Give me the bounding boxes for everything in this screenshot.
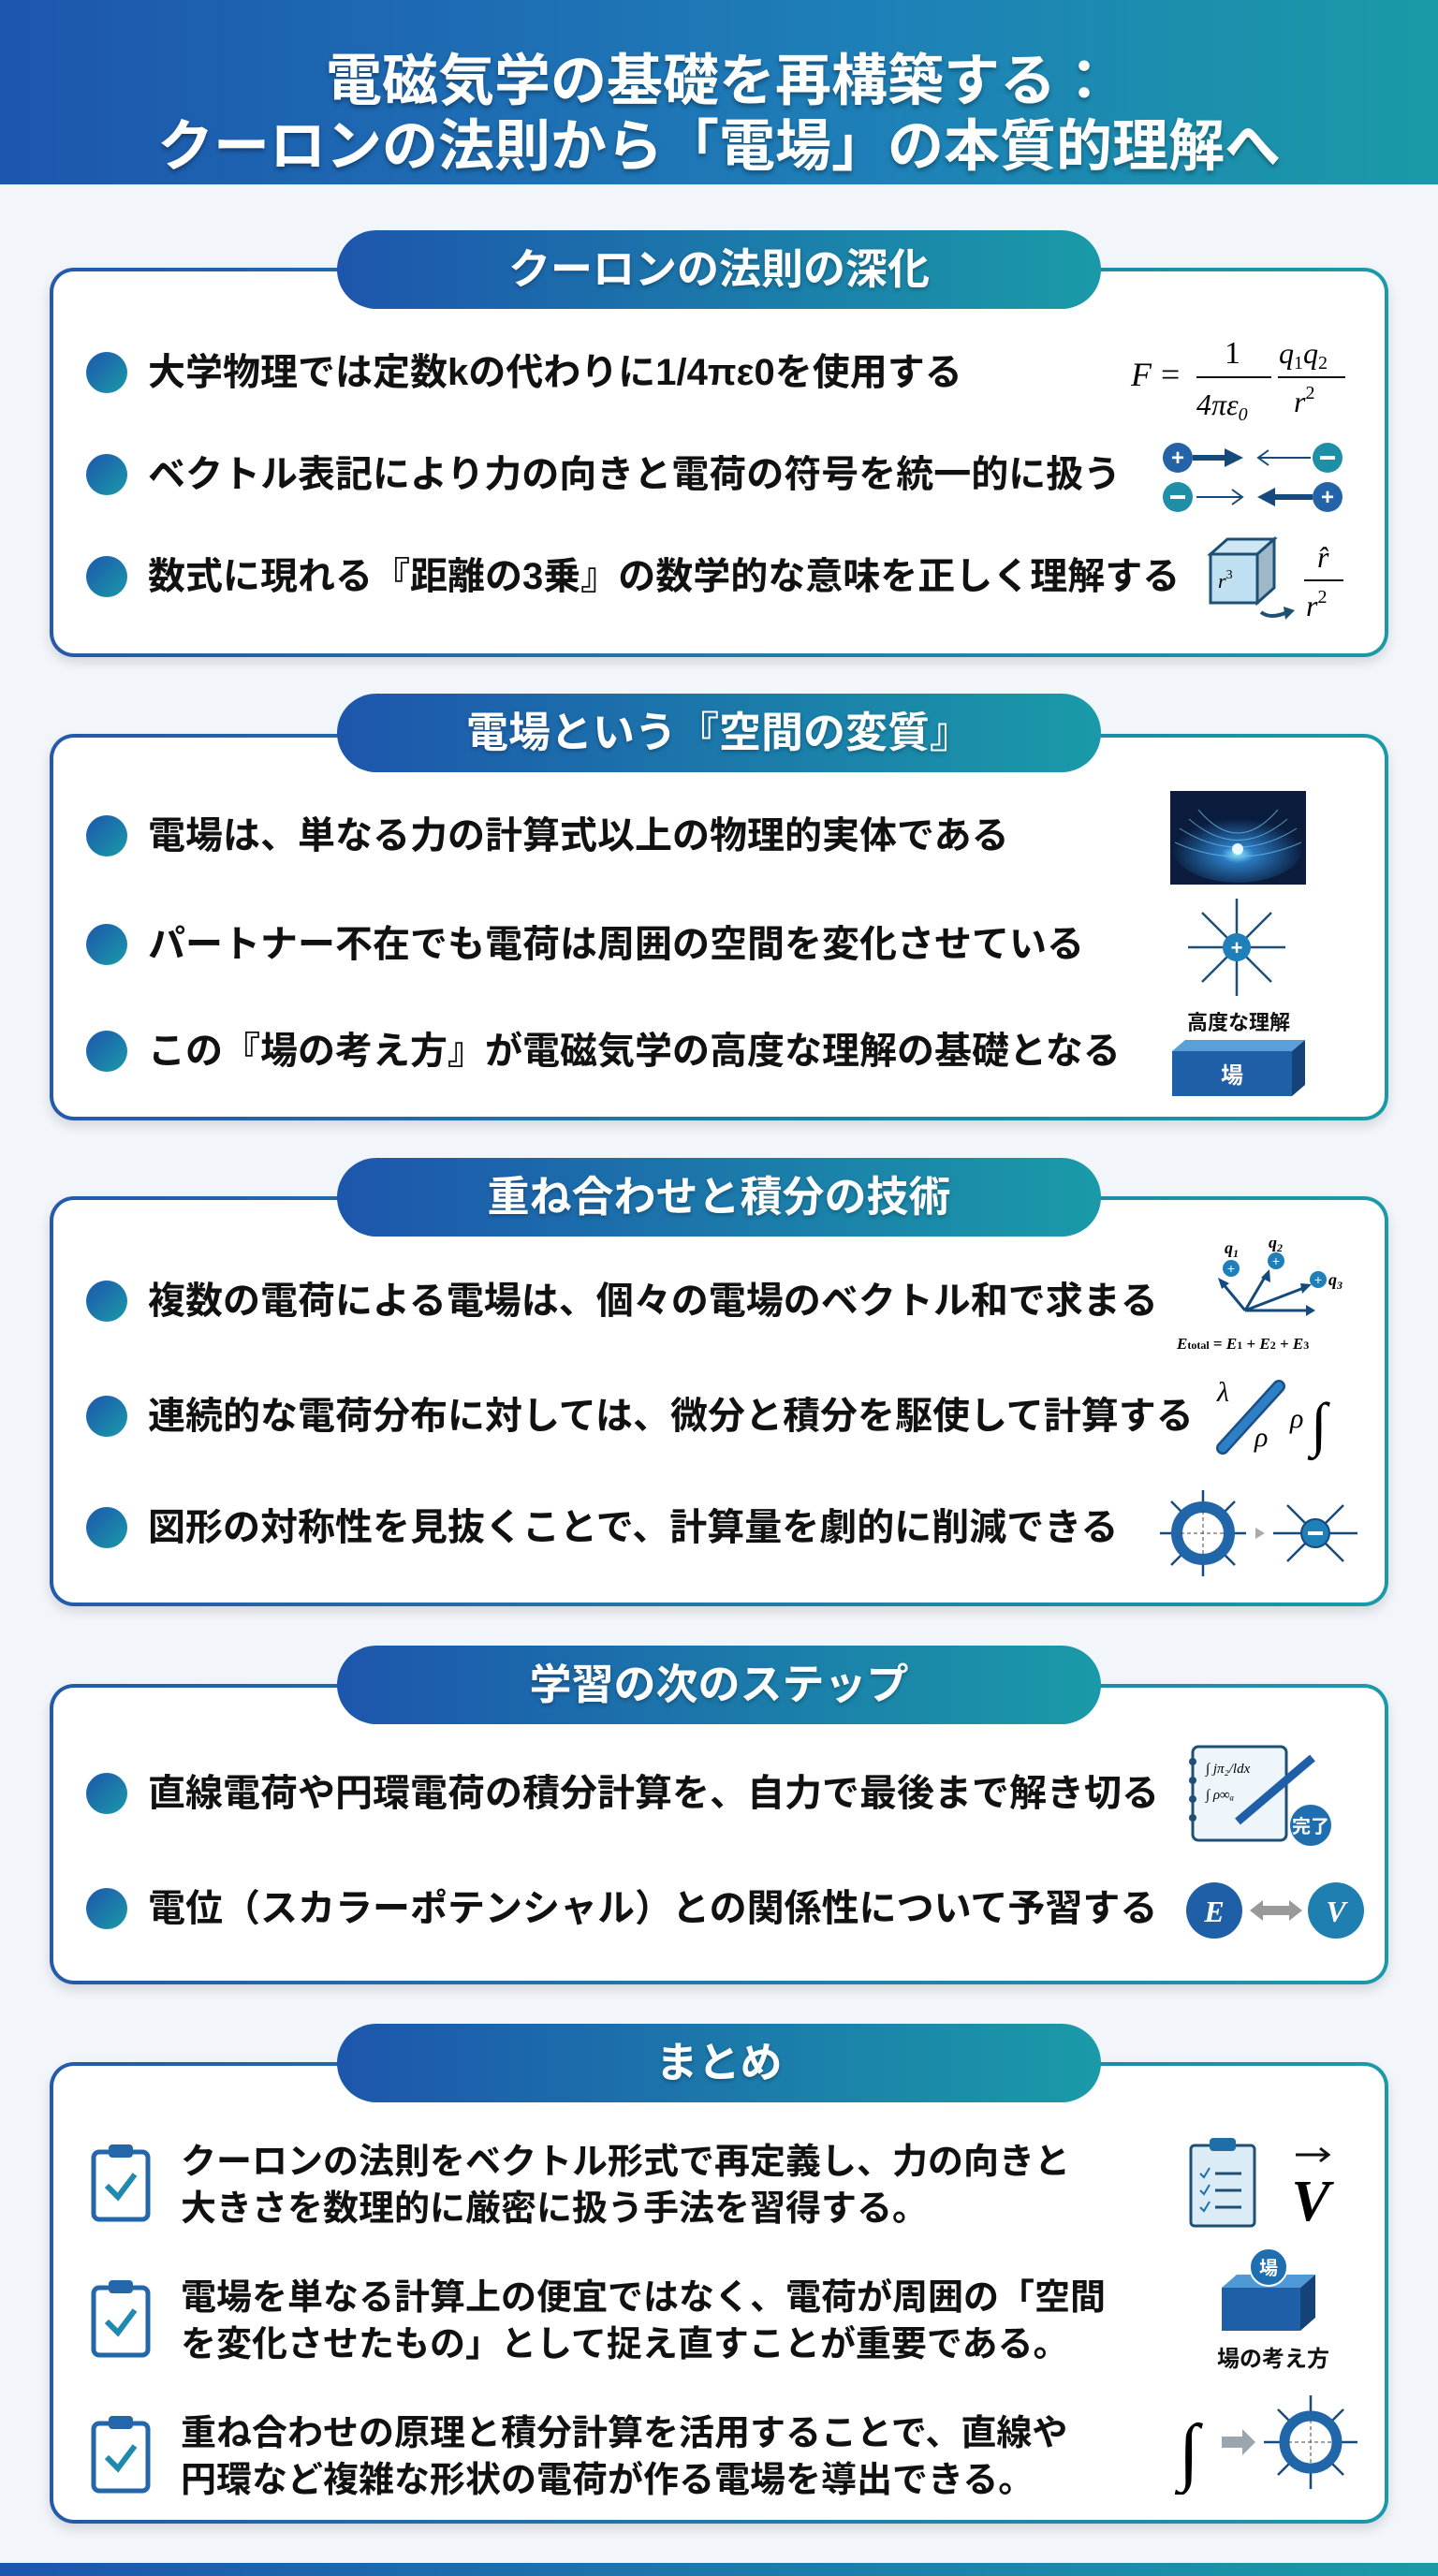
icon: vector sum: q	[1328, 1270, 1337, 1289]
summary item 1: 大きさを数理的に厳密に扱う手法を習得する。	[181, 2189, 928, 2229]
icon: vector sum: 3	[1336, 1279, 1343, 1292]
heading: electric field	[337, 694, 1101, 772]
icon: cube r3: r̂	[1317, 540, 1329, 574]
text: この『場の考え方』が電磁気学の高度な理解の基礎となる	[148, 1031, 1121, 1072]
panel: next steps	[50, 1684, 1388, 1984]
icon: E and V: E	[1203, 1895, 1225, 1928]
icon: vector sum: +	[1227, 1261, 1235, 1276]
icon: vector sum: 1	[1233, 1247, 1239, 1260]
icon: field block advanced: 高度な理解	[1187, 1011, 1290, 1034]
icon: coulomb formula: 0	[1239, 404, 1248, 425]
heading: next steps	[337, 1646, 1101, 1724]
summary item 2: を変化させたもの」として捉え直すことが重要である。	[181, 2325, 1068, 2364]
panel: superposition	[50, 1196, 1388, 1606]
icon: coulomb formula: 1	[1225, 336, 1240, 371]
icon: line charge integral: ρ	[1289, 1403, 1303, 1434]
icon: cube r3: r	[1218, 569, 1226, 593]
text: 直線電荷や円環電荷の積分計算を、自力で最後まで解き切る	[148, 1773, 1159, 1814]
icon: coulomb formula: =	[1161, 356, 1180, 393]
icon: cube r3: 3	[1226, 568, 1233, 582]
summary item 3	[92, 2414, 1067, 2500]
icon: check clipboard	[92, 2144, 150, 2222]
icon: field block concept: 場の考え方	[1217, 2347, 1329, 2372]
icon: charges forces	[1163, 443, 1343, 512]
header	[0, 0, 1438, 184]
text: 複数の電荷による電場は、個々の電場のベクトル和で求まる	[148, 1281, 1158, 1322]
heading: coulomb	[337, 230, 1101, 309]
panel: summary	[50, 2062, 1388, 2524]
icon: cube r3	[1207, 535, 1343, 622]
icon: radiating charge: +	[1231, 936, 1242, 959]
summary item 2	[92, 2278, 1106, 2364]
title line 2: クーロンの法則から「電場」の本質的理解へ	[157, 115, 1281, 178]
summary item 1	[92, 2143, 1070, 2229]
icon: field block concept: 場	[1259, 2253, 1278, 2280]
icon: coulomb formula: 2	[1305, 383, 1314, 403]
icon: clipboard list and V	[1189, 2138, 1334, 2230]
panel: coulomb	[50, 268, 1388, 657]
icon: charges forces: +	[1171, 446, 1184, 471]
icon: check clipboard	[92, 2416, 150, 2494]
icon: coulomb formula: r	[1294, 385, 1305, 418]
icon: charges forces: +	[1321, 485, 1334, 510]
text: パートナー不在でも電荷は周囲の空間を変化させている	[148, 924, 1084, 965]
icon: coulomb formula: F	[1130, 356, 1152, 393]
summary item 2: 電場を単なる計算上の便宜ではなく、電荷が周囲の「空間	[181, 2278, 1106, 2318]
icon: E and V	[1186, 1882, 1364, 1939]
heading: electric field: 電場という『空間の変質』	[466, 709, 972, 756]
icon: coulomb formula: q	[1303, 336, 1318, 370]
icon: vector sum: +	[1314, 1272, 1322, 1287]
icon: cube r3: r	[1306, 589, 1317, 622]
icon: line charge integral: λ	[1216, 1377, 1229, 1408]
text: 連続的な電荷分布に対しては、微分と積分を駆使して計算する	[148, 1396, 1194, 1437]
icon: line charge integral	[1216, 1377, 1330, 1461]
summary item 3: 円環など複雑な形状の電荷が作る電場を導出できる。	[181, 2461, 1034, 2500]
heading: coulomb: クーロンの法則の深化	[508, 245, 930, 293]
heading: superposition: 重ね合わせと積分の技術	[487, 1173, 951, 1221]
heading: superposition	[337, 1158, 1101, 1237]
text: 電位（スカラーポテンシャル）との関係性について予習する	[148, 1888, 1157, 1929]
text: 大学物理では定数kの代わりに1/4πε0を使用する	[148, 352, 962, 393]
icon: field block advanced	[1172, 1011, 1305, 1096]
text: 図形の対称性を見抜くことで、計算量を劇的に削減できる	[148, 1507, 1118, 1548]
icon: coulomb formula: 4πε	[1196, 388, 1239, 421]
text: 数式に現れる『距離の3乗』の数学的な意味を正しく理解する	[148, 556, 1180, 597]
heading: next steps: 学習の次のステップ	[529, 1661, 908, 1708]
text: 電場は、単なる力の計算式以上の物理的実体である	[148, 815, 1009, 856]
icon: integral to ring: ∫	[1175, 2410, 1204, 2495]
icon: ring symmetry	[1160, 1490, 1357, 1576]
icon: cube r3: 2	[1317, 587, 1327, 607]
icon: line charge integral: ∫	[1307, 1391, 1330, 1461]
icon: notebook complete: ∫ jπ₂/ldx	[1205, 1762, 1251, 1777]
icon: glowing field image	[1170, 791, 1306, 885]
icon: check clipboard	[92, 2280, 150, 2357]
icon: coulomb formula: 1	[1294, 353, 1303, 373]
icon: notebook complete: 完了	[1292, 1811, 1329, 1838]
icon: coulomb formula: q	[1279, 336, 1294, 370]
summary item 1: クーロンの法則をベクトル形式で再定義し、力の向きと	[181, 2143, 1070, 2182]
icon: field block advanced: 場	[1221, 1057, 1243, 1090]
icon: coulomb formula: 2	[1318, 353, 1328, 373]
summary item 3: 重ね合わせの原理と積分計算を活用することで、直線や	[181, 2414, 1067, 2453]
icon: vector sum: +	[1272, 1253, 1280, 1268]
text: ベクトル表記により力の向きと電荷の符号を統一的に扱う	[148, 454, 1121, 495]
icon: vector sum	[1176, 1240, 1343, 1353]
icon: vector sum: 2	[1276, 1241, 1283, 1254]
icon: vector sum: Etotal = E1 + E2 + E3	[1176, 1335, 1309, 1353]
icon: radiating charge	[1188, 899, 1285, 996]
icon: coulomb formula	[1130, 336, 1345, 425]
title line 1: 電磁気学の基礎を再構築する：	[326, 50, 1112, 112]
heading: summary	[337, 2024, 1101, 2102]
icon: E and V: V	[1326, 1895, 1348, 1928]
icon: field block concept	[1217, 2249, 1329, 2372]
icon: line charge integral: ρ	[1254, 1422, 1268, 1453]
heading: summary: まとめ	[655, 2039, 783, 2086]
panel: electric field	[50, 734, 1388, 1120]
icon: notebook complete: ∫ ρ∞ₐ	[1205, 1788, 1234, 1803]
icon: integral to ring	[1175, 2395, 1357, 2495]
icon: notebook complete	[1189, 1745, 1331, 1846]
